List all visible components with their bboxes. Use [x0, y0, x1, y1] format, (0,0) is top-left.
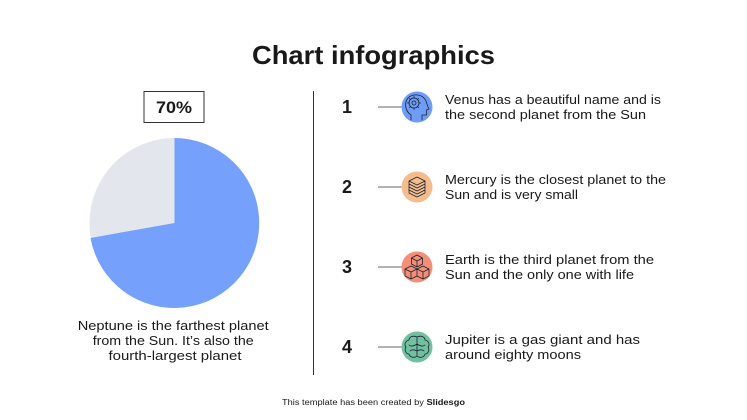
item 4 text: Jupiter is a gas giant and has [445, 332, 641, 347]
item 1 text: Venus has a beautiful name and is [445, 92, 662, 107]
footer credit: This template has been created by Slidesgo [282, 398, 465, 407]
item 1 [342, 92, 665, 122]
icon: brain [402, 332, 432, 362]
item 1 text: the second planet from the Sun [445, 107, 646, 122]
divider line [312, 91, 314, 375]
icon: cubes [402, 252, 432, 282]
item 4 text: around eighty moons [445, 347, 582, 362]
icon: head with gear [402, 92, 432, 122]
item 3 text: Sun and the only one with life [445, 267, 634, 282]
item 3 [342, 252, 658, 282]
item 2 text: Mercury is the closest planet to the [445, 172, 666, 187]
panel: pie chart [78, 92, 272, 363]
connector 1 [378, 106, 402, 108]
pie chart [90, 138, 260, 308]
number 3: 3 [342, 257, 352, 277]
pie description: Neptune is the farthest planet [78, 318, 269, 333]
connector 2 [378, 186, 402, 188]
item 2 [342, 172, 670, 202]
number 2: 2 [342, 177, 352, 197]
percentage box [144, 92, 204, 122]
pie description: from the Sun. It’s also the [93, 333, 254, 348]
item 3 text: Earth is the third planet from the [445, 252, 654, 267]
pie description: fourth-largest planet [108, 348, 242, 363]
number 4: 4 [342, 337, 352, 357]
number 1: 1 [342, 97, 352, 117]
item 2 text: Sun and is very small [445, 187, 578, 202]
connector 4 [378, 346, 402, 348]
item 4 [342, 332, 644, 362]
title: Chart infographics [252, 40, 495, 70]
connector 3 [378, 266, 402, 268]
percentage box: 70% [156, 98, 192, 117]
icon: stacked layers [402, 172, 432, 202]
